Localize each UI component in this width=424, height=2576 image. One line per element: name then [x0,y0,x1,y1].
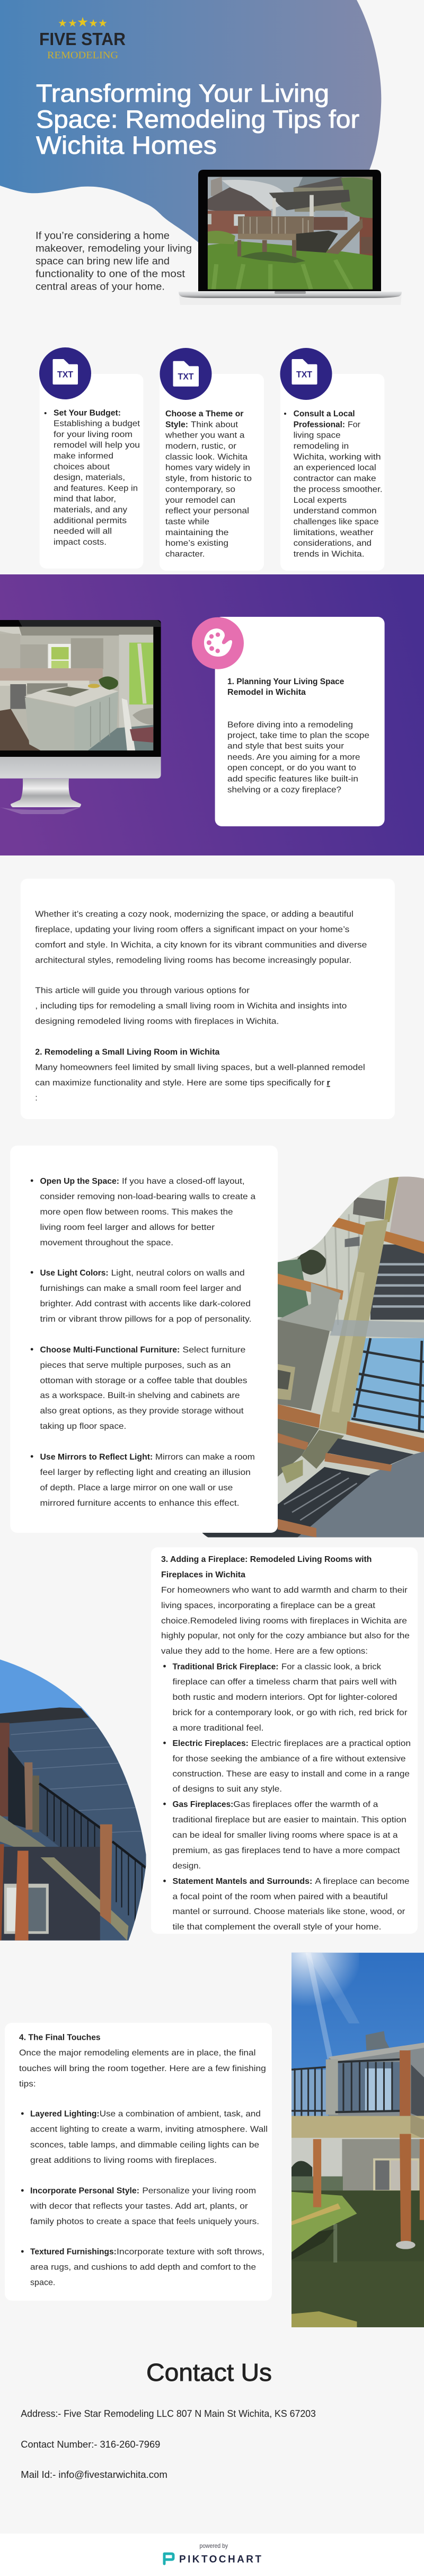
tip: multi-functional furniture [31,1346,248,1431]
tip: textured furnishings: area rugs, and cushions to add depth and comfort to the [30,2263,256,2272]
tip: multi-functional furniture: pieces that serve multiple purposes, such as an [40,1361,231,1370]
bullet text: theme: whether you want a [165,431,245,440]
intro text: makeover, remodeling your living [36,243,192,255]
option: traditional brick: For a classic look, a brick [281,1662,382,1671]
tip: use light colors: Light, neutral colors on walls and [111,1269,245,1278]
panel: adding a fireplace [151,1547,418,1934]
contact: address: Address:- Five Star Remodeling LLC 807 N Main St Wichita, KS 67203 [21,2408,316,2419]
bullet text: professional: Wichita, working with [294,452,381,461]
card background [280,374,385,571]
paragraph: article guide: This article will guide you through various options for [35,986,250,995]
heading: 1. Planning Your Living Space [227,677,344,686]
bullet text: budget: for your living room [54,430,132,439]
option: gas: Gas fireplaces offer the warmth of a [233,1800,378,1809]
bullet text: professional: the process smoother. [294,485,383,494]
hero section [0,0,402,305]
paragraph: article guide: , including tips for remodeling a small living room in Wichita and insights into [35,1002,347,1011]
option: mantels: Statement Mantels and Surrounds: [173,1877,312,1886]
option: electric: construction. These are easy to install and come in a range [173,1769,410,1778]
tip: multi-functional furniture: taking up floor space. [40,1422,126,1431]
laptop with deck photo [179,170,402,305]
heading and intro: highly popular, not only for the cozy ambiance but also for the [161,1631,410,1640]
logo: Five Star Remodeling: FIVE STAR [39,29,126,49]
bullet text: professional: For [348,420,361,429]
tip: textured furnishings [21,2247,264,2287]
tip: open up the space: living room feel larger and allows for better [40,1223,215,1232]
intro text: If you’re considering a home [36,231,170,242]
bullet text: budget: Establishing a budget [54,420,140,429]
card background [39,374,143,569]
bullet text: budget [45,408,140,547]
heading and intro: value they add to the home. Here are a few options: [161,1647,368,1656]
body text: Before diving into a remodeling [227,721,353,730]
heading: Remodel in Wichita [227,688,306,697]
tip: mirrors: Use Mirrors to Reflect Light: [40,1453,153,1462]
tip: layered lighting: great additions to living rooms with fireplaces. [30,2156,217,2165]
bullet text: professional: limitations, weather [294,528,374,537]
bullet text: theme: your remodel can [165,496,235,505]
footer: powered by Piktochart [0,2534,424,2576]
panel: final touches [5,2023,272,2301]
bullet text: theme: Choose a Theme or [165,409,244,418]
paragraph: article guide: designing remodeled living rooms with fireplaces in Wichita. [35,1017,279,1026]
desktop monitor with kitchen photo [0,620,161,814]
heading and intro: 3. Adding a Fireplace: Remodeled Living Rooms with [161,1555,372,1564]
bullet text: theme: Style: [165,420,188,429]
paragraph: small spaces: : [35,1094,38,1103]
heading and intro [161,1555,410,1656]
card background [5,2023,272,2301]
tip: mirrors: Mirrors can make a room [155,1453,255,1462]
bullet text: theme: taste while [165,518,209,526]
heading [227,677,344,697]
tip: mirrors: mirrored furniture accents to enhance this effect. [40,1499,240,1508]
planning card [192,617,385,826]
bullet text: theme: contemporary, so [165,485,235,494]
paragraph: small spaces: Many homeowners feel limited by small living spaces, but a well-planned remodel [35,1063,365,1072]
bullet text: budget: design, materials, [54,473,125,482]
heading and intro: living spaces, incorporating a fireplace can be a great [161,1601,376,1610]
heading and intro: 4. The Final Touches [19,2033,101,2042]
heading: contact us: Contact Us [146,2359,272,2386]
tip: open up the space [31,1177,255,1247]
heading and intro: Fireplaces in Wichita [161,1570,245,1579]
option: electric: Electric fireplaces are a practical option [251,1739,411,1748]
icon: pink palette [192,617,244,669]
option: electric [163,1739,411,1794]
option: mantels: a focal point of the room when paired with a beautiful [173,1892,388,1901]
photo: deck from below in blob shape [201,1175,424,1538]
photo: house with stairs in circular shape [0,1657,152,1942]
option: traditional brick: both rustic and modern interiors. Opt for lighter-colored [173,1693,398,1702]
option: mantels: mantel or surround. Choose materials like stone, wood, or [173,1907,405,1916]
icon: TXT folder: TXT [178,372,194,382]
title: Space: Remodeling Tips for [36,105,359,133]
body text: open concept, or do you want to [227,764,356,773]
bullet text: professional: considerations, and [294,539,372,548]
paragraph: whether [35,910,367,965]
purple background [0,574,424,855]
paragraph: whether: Whether it’s creating a cozy nook, modernizing the space, or adding a beautiful [35,910,354,919]
heading and intro: tips: [19,2080,36,2089]
intro text [36,231,192,292]
tip: mirrors: feel larger by reflecting light and creating an illusion [40,1468,251,1477]
option: traditional brick: a more traditional feel. [173,1724,264,1733]
panel: small room tips [10,1146,278,1533]
option: mantels: tile that complement the overall style of your home. [173,1923,382,1932]
tip: open up the space: movement throughout the space. [40,1238,173,1247]
paragraph: small spaces: can maximize functionality and style. Here are some tips specifically for [35,1079,325,1088]
icon: TXT folder [39,347,91,399]
paragraph: whether: comfort and style. In Wichita, a city known for its vibrant communities and diverse [35,941,367,950]
tip: multi-functional furniture: Choose Multi-Functional Furniture: [40,1346,180,1355]
bullet text: theme: character. [165,549,205,559]
wordmark: PIKTOCHART [179,2554,261,2565]
title [36,79,359,159]
icon: TXT folder [280,348,332,400]
icon: TXT folder: TXT [296,370,313,380]
tip: open up the space: consider removing non-load-bearing walls to create a [40,1192,255,1201]
photo: deck under blue sky [292,1953,424,2327]
bullet text: budget: impact costs. [54,538,107,547]
tip: personal style [21,2186,259,2226]
title: Wichita Homes [36,131,217,159]
option: electric: Electric Fireplaces: [173,1739,249,1748]
tip: textured furnishings: space. [30,2278,55,2287]
intro text: space can bring new life and [36,256,170,267]
bullet text: budget: needed will all [54,527,112,536]
contact section [21,2359,316,2480]
contact: phone: Contact Number:- 316-260-7969 [21,2439,160,2450]
tip: personal style: with decor that reflects your tastes. Add art, plants, or [30,2202,248,2211]
bullet text: theme: homes vary widely in [165,464,250,473]
tip: personal style: Incorporate Personal Style: [30,2186,139,2196]
card background [160,374,264,571]
tip: mirrors [31,1453,255,1508]
card background [21,879,395,1119]
bullet text: budget: mind that labor, [54,495,116,504]
bullet text: professional: understand common [294,507,377,516]
logo: Five Star Remodeling: REMODELING [47,50,118,61]
bullet text: professional: contractor can make [294,474,376,483]
tip: textured furnishings: Incorporate texture with soft throws, [117,2247,264,2256]
option: gas: traditional fireplace but are easier to maintain. This option [173,1815,407,1824]
heading and intro: For homeowners who want to add warmth and charm to their [161,1586,408,1595]
paragraph: whether: fireplace, updating your living room offers a significant impact on your home’s [35,925,349,934]
bullet text: theme: maintaining the [165,528,229,537]
option: electric: for those seeking the ambiance of a fire without extensive [173,1754,406,1763]
footer: powered by Piktochart: powered by [199,2542,228,2549]
option: gas: can be ideal for smaller living rooms where space is at a [173,1831,398,1840]
title: Transforming Your Living [36,79,329,107]
bullet text: theme [165,409,252,559]
body text [227,721,369,794]
bullet text: professional: Local experts [294,496,347,505]
bullet text: theme: classic look. Wichita [165,452,248,461]
option: mantels [163,1877,410,1932]
panel: purple planning section [0,574,424,855]
bullet text: professional: remodeling in [294,442,349,451]
body text: and style that best suits your [227,742,344,751]
paragraph: small spaces [35,1063,365,1103]
tip: multi-functional furniture: ottoman with storage or a coffee table that doubles [40,1376,247,1385]
bullet text: budget: make informed [54,452,113,460]
tip: textured furnishings: Textured Furnishings: [30,2247,117,2256]
option: gas: Gas Fireplaces: [173,1800,233,1809]
heading and intro: choice.Remodeled living rooms with fireplaces in Wichita are [161,1617,407,1626]
card background [215,617,385,826]
paragraph: small spaces: r [326,1079,330,1088]
bullet text: budget: and features. Keep in [54,484,138,493]
option: traditional brick [163,1662,408,1733]
option: traditional brick: brick for a contemporary look, or go with rich, red brick for [173,1708,408,1717]
heading and intro [19,2033,266,2089]
card background [151,1547,418,1934]
body text: shelving or a cozy fireplace? [227,785,341,794]
tip: open up the space: more open flow between rooms. This makes the [40,1208,233,1217]
option: gas: premium, as gas fireplaces tend to have a more compact [173,1846,400,1855]
icon: TXT folder: TXT [57,370,74,380]
hero blue blob [0,0,381,255]
tip: use light colors: brighter. Add contrast with accents like dark-colored [40,1299,251,1308]
bullet text: professional [284,409,383,559]
tip: open up the space: If you have a closed-off layout, [122,1177,245,1186]
logo: Five Star Remodeling [39,17,126,61]
bullet text: theme: reflect your personal [165,507,249,516]
bullet text: professional: challenges like space [294,518,379,526]
card 2: choose a theme or style [160,348,264,571]
body text: add specific features like built-in [227,774,358,783]
intro text: functionality to one of the most [36,268,186,280]
tip: layered lighting: sconces, table lamps, and dimmable ceiling lights can be [30,2141,259,2150]
tip: open up the space: Open Up the Space: [40,1177,119,1186]
bullet text: theme: home’s existing [165,539,228,548]
tip: layered lighting: Use a combination of ambient, task, and [100,2110,261,2119]
bullet text: budget: additional permits [54,516,127,525]
tip: layered lighting: Layered Lighting: [30,2110,100,2119]
bullet text: theme: Think about [191,420,238,429]
option: gas: design. [173,1862,201,1871]
bullet text: budget: choices about [54,462,110,471]
bullet text: budget: remodel will help you [54,441,140,450]
bullet text: professional: trends in Wichita. [294,549,365,559]
option: electric: of designs to suit any style. [173,1785,282,1794]
heading: section 2: 2. Remodeling a Small Living Room in Wichita [35,1047,219,1056]
icon: TXT folder [160,348,212,400]
intro text: central areas of your home. [36,281,165,292]
tip: personal style: family photos to create a space that feels uniquely yours. [30,2217,259,2226]
bullet text: theme: style, from historic to [165,474,252,483]
panel: intro article text [21,879,395,1119]
tip: multi-functional furniture: Select furniture [182,1346,246,1355]
tip: personal style: Personalize your living room [142,2186,256,2196]
body text: project, take time to plan the scope [227,731,369,740]
paragraph: whether: architectural styles, remodeling living rooms has become increasingly popular. [35,956,351,965]
tip: layered lighting [21,2110,268,2165]
card 1: set your budget [39,347,143,569]
option: traditional brick: Traditional Brick Fireplace: [173,1662,279,1671]
heading and intro: touches will bring the room together. Here are a few finishing [19,2064,266,2073]
card background [10,1146,278,1533]
paragraph: article guide [35,986,347,1026]
bullet text: professional: Professional: [294,420,345,429]
option: gas [163,1800,407,1871]
card 3: consult a local professional [280,348,385,571]
contact: email: Mail Id:- info@fivestarwichita.com [21,2469,167,2480]
option: traditional brick: fireplace can offer a timeless charm that pairs well with [173,1678,396,1687]
tip: use light colors: Use Light Colors: [40,1269,108,1278]
tip: use light colors: trim or vibrant throw pillows for a pop of personality. [40,1315,252,1324]
tip: multi-functional furniture: also great options, as they provide storage without [40,1407,244,1416]
bullet text: professional: living space [294,431,341,440]
bullet text: budget: Set Your Budget: [54,408,121,417]
icon: Piktochart P [164,2554,173,2564]
bullet text: professional: an experienced local [294,464,376,473]
tip: use light colors: furnishings can make a small room feel larger and [40,1284,241,1293]
tip: layered lighting: accent lighting to create a warm, inviting atmosphere. Wall [30,2125,268,2134]
bullet text: theme: modern, rustic, or [165,442,237,451]
bullet text: budget: materials, and any [54,505,127,514]
option: mantels: A fireplace can become [315,1877,410,1886]
heading and intro: Once the major remodeling elements are in place, the final [19,2049,255,2058]
tip: use light colors [31,1269,252,1324]
tip: mirrors: of depth. Place a large mirror on one wall or use [40,1483,233,1492]
body text: needs. Are you aiming for a more [227,753,360,762]
bullet text: professional: Consult a Local [294,409,355,418]
tip: multi-functional furniture: as a workspace. Built-in shelving and cabinets are [40,1391,240,1400]
